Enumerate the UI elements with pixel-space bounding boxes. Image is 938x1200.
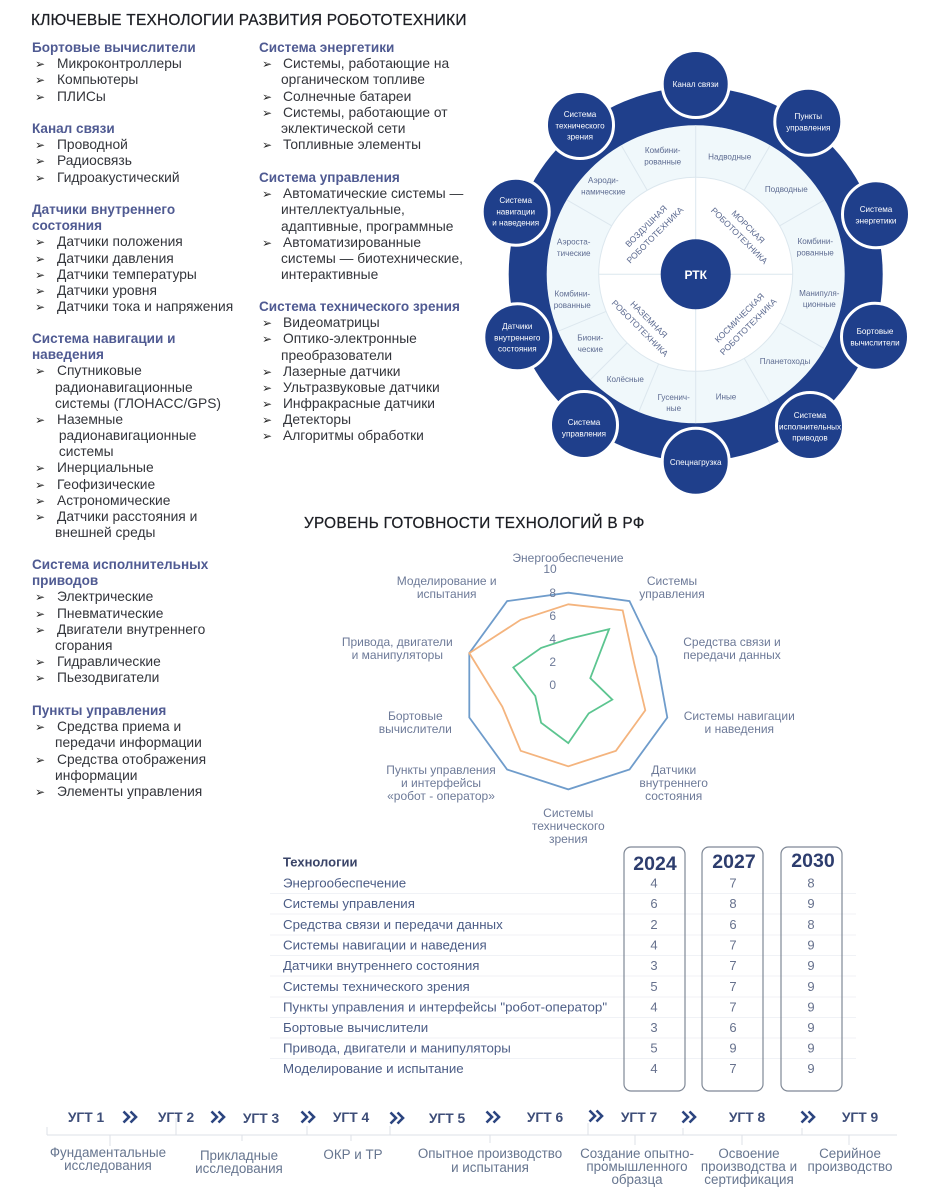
satellite nodes: приводов [792,434,828,443]
values 2024: 6 [650,896,658,911]
text block: internal state sensors: Датчики внутреннего [32,202,175,217]
stage descriptions: исследования [195,1161,283,1176]
level labels: УГТ 2 [158,1110,194,1125]
text block: energy system: Системы, работающие на [283,56,449,71]
axis scale: 2 [549,655,556,669]
level labels [68,1110,878,1126]
table header: Технологии [283,854,357,870]
satellite nodes: Спецнагрузка [670,458,722,467]
text block: navigation and guidance: Геофизические [57,477,155,492]
table header: 2024 [633,853,677,875]
table header [283,850,835,875]
text block: vision system: Детекторы [283,412,351,427]
axis labels: и наведения [705,722,774,736]
axis labels: Бортовые [388,709,443,723]
technology names [283,876,607,1076]
level labels: УГТ 6 [527,1110,563,1125]
values 2030: 9 [807,979,815,994]
axis labels: зрения [549,832,588,846]
timeline rule [47,1118,897,1146]
text block: vision system: Система технического зрения [259,299,460,314]
values 2030: 9 [807,896,815,911]
values 2027: 8 [729,896,737,911]
sector labels: domains: РОБОТОТЕХНИКА [718,296,779,357]
sector labels: outer types: Надводные [708,153,752,162]
text block: onboard computers: ПЛИСы [57,89,106,104]
text block: internal state sensors: Датчики температуры [57,267,197,282]
satellite nodes: технического [555,121,605,130]
axis labels: технического [532,819,605,833]
values 2027 [729,876,737,1076]
table header: 2027 [712,851,756,873]
sector core [599,177,793,371]
values 2027: 7 [729,938,737,952]
technology names: Системы технического зрения [283,979,470,994]
axis scale: 8 [549,586,556,600]
level labels: УГТ 4 [333,1110,369,1125]
stage descriptions [50,1145,892,1187]
axis labels: и интерфейсы [401,776,481,790]
technology names: Бортовые вычислители [283,1020,428,1035]
stage descriptions: производства и [701,1159,797,1174]
text block: navigation and guidance: Система навигации и [32,331,175,346]
text block: vision system: Оптико-электронные [283,331,417,346]
text block: control stations: информации [55,768,138,783]
text block: actuator system: приводов [32,573,98,588]
text block: onboard computers: Компьютеры [57,72,138,87]
sector labels: outer types: ные [666,404,682,413]
stage descriptions: образца [611,1172,663,1187]
sector labels: outer types: рованные [554,301,591,310]
axis labels: Средства связи и [683,635,781,649]
sector labels: domains [610,196,779,359]
values 2024: 4 [650,876,658,890]
axis labels: передачи данных [683,648,781,662]
text block: navigation and guidance: Наземные [57,412,123,427]
text block: onboard computers: Микроконтроллеры [57,56,182,71]
technology names: Энергообеспечение [283,876,406,890]
axis labels: Системы [543,806,593,820]
text block: energy system: Система энергетики [259,40,394,55]
sector labels: domains: КОСМИЧЕСКАЯ [713,291,766,345]
values 2024: 4 [650,1061,658,1076]
stage descriptions: Фундаментальные [50,1145,166,1160]
stage descriptions: Серийное [819,1146,881,1161]
sector labels: outer types: Колёсные [607,375,644,384]
stage descriptions: Освоение [718,1146,780,1161]
center hub [661,239,731,309]
values 2030 [807,876,815,1076]
satellite nodes: вычислители [850,338,900,347]
level labels: УГТ 1 [68,1110,104,1125]
sector labels: domains: РОБОТОТЕХНИКА [610,298,671,359]
text block: navigation and guidance: внешней среды [55,525,155,540]
axis scale: 0 [549,678,556,692]
text block: control system: интеллектуальные, [281,202,405,217]
axis labels: Энергообеспечение [512,551,624,565]
sector labels: domains: НАЗЕМНАЯ [628,299,669,340]
axis scale: 4 [549,632,556,646]
sector labels: outer types: Биони- [577,334,604,342]
axis labels: Датчики [651,763,696,777]
values 2024: 2 [650,917,658,932]
technology names: Системы навигации и наведения [283,938,487,952]
satellite nodes: энергетики [856,216,896,225]
text block: communication channel [32,121,180,185]
values 2024: 5 [650,979,658,994]
technology names: Моделирование и испытание [283,1061,464,1076]
text block: navigation and guidance: Инерциальные [57,460,154,475]
timeline: technology readiness levels [47,1110,897,1187]
axis labels: внутреннего [639,776,708,790]
text block: control stations: Пункты управления [32,703,166,718]
text block: navigation and guidance: Спутниковые [57,363,142,378]
stage descriptions: Создание опытно- [580,1146,694,1161]
text block: control stations: Средства приема и [57,719,181,734]
axis scale: 10 [543,562,557,576]
sector labels: outer types: ционные [803,300,836,309]
level labels: УГТ 8 [729,1110,765,1125]
satellite nodes: зрения [567,133,593,142]
text block: control system: системы — биотехнические, [281,251,463,266]
text block: navigation and guidance: радионавигационные [55,380,193,395]
text block: energy system: Топливные элементы [283,137,421,152]
outer ring [509,87,883,461]
sector labels: domains: ВОЗДУШНАЯ [623,203,669,249]
title: key technologies: КЛЮЧЕВЫЕ ТЕХНОЛОГИИ РАЗВИТИЯ РОБОТОТЕХНИКИ [31,12,467,29]
technology names: Системы управления [283,896,415,911]
axis labels: Привода, двигатели [342,635,453,649]
satellite nodes: исполнительных [779,422,841,431]
values 2030: 9 [807,958,815,973]
level labels: УГТ 5 [429,1111,465,1126]
axis labels: Моделирование и [397,574,497,588]
sector labels: outer types: Гусенич- [658,393,690,402]
sector labels: outer types: Комбини- [798,237,833,246]
series 2030 [469,593,667,789]
stage descriptions: Прикладные [200,1148,278,1163]
satellite nodes: управления [786,123,830,132]
sector labels: outer types: Иные [716,392,737,401]
text block: vision system: Алгоритмы обработки [283,428,424,443]
text block: energy system: органическом топливе [281,72,425,87]
stage descriptions: промышленного [586,1159,688,1174]
axis labels [342,551,795,846]
satellite nodes: Система [564,110,597,119]
values 2027: 7 [729,958,737,973]
axis scale: 6 [549,609,556,623]
text block: energy system: Системы, работающие от [283,105,448,120]
text block: control stations [32,703,206,799]
sector labels: outer types: Подводные [765,185,808,194]
values 2030: 9 [807,938,815,952]
text block: energy system: эклектической сети [281,121,405,136]
satellite nodes: состояния [498,345,537,354]
axis labels: и манипуляторы [352,648,443,662]
text block: navigation and guidance: системы [59,444,114,459]
text block: vision system: Лазерные датчики [283,364,401,379]
text block: actuator system [32,557,208,685]
text block: actuator system: Гидравлические [57,654,161,669]
sector labels: outer types: Планетоходы [760,357,810,366]
text block: actuator system: Пневматические [57,606,163,621]
satellite nodes: управления [562,429,606,438]
technology names: Средства связи и передачи данных [283,917,503,932]
satellite nodes [482,50,910,495]
wheel diagram: robotics technical complex [482,50,910,495]
text block: navigation and guidance: Астрономические [57,493,170,508]
text block: control system: Автоматизированные [283,235,421,250]
axis labels: вычислители [379,722,452,736]
table header: 2030 [791,850,835,872]
text block: communication channel: Канал связи [32,121,115,136]
values 2027: 6 [729,1020,737,1035]
satellite nodes: и наведения [492,219,539,228]
text block: vision system: преобразователи [281,348,392,363]
text block: energy system [259,40,450,152]
text block: navigation and guidance: радионавигационные [59,428,196,443]
text block: communication channel: Радиосвязь [57,153,132,168]
axis labels: состояния [645,789,702,803]
stage descriptions: производство [808,1159,892,1174]
text block: communication channel: Проводной [57,137,128,152]
heading: readiness level: УРОВЕНЬ ГОТОВНОСТИ ТЕХНОЛОГИЙ В РФ [304,514,645,532]
values 2027: 6 [729,917,737,932]
axis labels: испытания [417,587,477,601]
values 2024: 4 [650,1000,658,1014]
text block: internal state sensors: Датчики положения [57,234,183,249]
values 2024: 4 [650,938,658,952]
stage descriptions: и испытания [451,1160,529,1175]
sector labels: domains: РОБОТОТЕХНИКА [709,205,770,266]
axis scale [543,562,557,692]
values 2024: 3 [650,1020,658,1035]
center hub: РТК [684,268,708,282]
chevrons [124,1110,814,1124]
values 2030: 9 [807,1061,815,1076]
text block: control stations: Элементы управления [57,784,202,799]
text block: actuator system: Двигатели внутреннего [57,622,205,637]
text block: onboard computers [32,40,196,104]
values 2024: 5 [650,1040,658,1056]
axis labels: управления [639,587,705,601]
text block: actuator system: Система исполнительных [32,557,208,572]
text block: control system: Автоматические системы — [283,186,463,201]
series 2024 [513,629,612,743]
sector labels: outer types: Аэроста- [557,238,591,246]
text block: internal state sensors: Датчики тока и напряжения [57,299,233,314]
satellite nodes: Пункты [795,112,822,121]
text block: actuator system: Пьезодвигатели [57,670,159,685]
text block: navigation and guidance: наведения [32,347,104,362]
text block: control system [259,170,464,282]
satellite nodes: Бортовые [857,327,894,336]
values 2027: 7 [729,979,737,994]
satellite nodes: Система [499,196,532,205]
values 2024: 3 [650,958,658,973]
text block: navigation and guidance [32,331,221,540]
sector labels: outer types: тические [557,249,591,258]
values 2024 [650,876,658,1076]
technology names: Датчики внутреннего состояния [283,958,480,973]
stage descriptions: исследования [64,1158,152,1173]
satellite nodes: Канал связи [673,80,719,89]
values 2030: 9 [807,1000,815,1014]
text block: control system: адаптивные, программные [281,219,453,234]
text block: communication channel: Гидроакустический [57,170,180,185]
sector labels: outer types: рованные [797,248,834,257]
series 2027 [469,604,645,766]
text block: vision system [259,299,460,443]
text block: internal state sensors: состояния [32,218,102,233]
values 2027: 9 [729,1040,737,1056]
text block: navigation and guidance: Датчики расстояния и [57,509,197,524]
sector labels: outer types: Комбини- [645,146,681,155]
text block: navigation and guidance: системы (ГЛОНАСС/GPS) [55,396,221,411]
values 2030: 8 [807,876,815,890]
text block: vision system: Ультразвуковые датчики [283,380,440,395]
text block: energy system: Солнечные батареи [283,89,411,104]
axis labels: «робот - оператор» [387,789,495,803]
satellite nodes: Датчики [502,322,532,331]
satellite nodes: внутреннего [494,333,541,342]
table: readiness levels by year [270,847,856,1091]
sector labels: outer types [554,146,840,413]
inner disk [547,125,845,423]
text block: internal state sensors: Датчики уровня [57,283,157,298]
sector labels: outer types: Аэроди- [588,176,619,185]
satellite nodes: Система [568,418,601,427]
technology names: Пункты управления и интерфейсы "робот-оператор" [283,1000,607,1014]
values 2027: 7 [729,1061,737,1076]
text block: internal state sensors: Датчики давления [57,251,174,266]
values 2030: 9 [807,1020,815,1035]
sector labels: domains: МОРСКАЯ [730,208,767,245]
sector labels: outer types: рованные [644,157,682,166]
sector labels: outer types: намические [581,187,626,196]
values 2030: 8 [807,917,815,932]
axis labels: Пункты управления [386,763,496,777]
values 2030: 9 [807,1040,815,1056]
sector labels: outer types: ческие [578,345,603,354]
text block: onboard computers: Бортовые вычислители [32,40,196,55]
text block: control system: интерактивные [281,267,378,282]
text block: control stations: Средства отображения [57,752,206,767]
sector labels: domains: РОБОТОТЕХНИКА [625,204,685,265]
text block: control stations: передачи информации [55,735,202,750]
text block: control system: Система управления [259,170,400,185]
sector labels: outer types: Комбини- [555,290,590,298]
text block: internal state sensors [32,202,233,314]
axis labels: Системы навигации [684,709,795,723]
stage descriptions: ОКР и ТР [323,1147,383,1162]
satellite nodes: Система [860,205,893,214]
values 2027: 7 [729,1000,737,1014]
text block: vision system: Инфракрасные датчики [283,396,435,411]
satellite nodes: Система [794,411,827,420]
values 2027: 7 [729,876,737,890]
text block: actuator system: сгорания [55,638,112,653]
level labels: УГТ 9 [842,1110,878,1125]
sector labels: outer types: Манипуля- [799,289,840,298]
year column boxes [624,847,842,1091]
stage descriptions: сертификация [704,1172,794,1187]
radar chart: technology readiness [342,551,795,846]
level labels: УГТ 3 [243,1111,279,1126]
technology names: Привода, двигатели и манипуляторы [283,1040,511,1056]
level labels: УГТ 7 [621,1110,657,1125]
stage descriptions: Опытное производство [418,1146,562,1161]
text block: actuator system: Электрические [57,589,153,604]
text block: vision system: Видеоматрицы [283,315,380,330]
satellite nodes: навигации [496,207,535,216]
axis labels: Системы [647,574,697,588]
